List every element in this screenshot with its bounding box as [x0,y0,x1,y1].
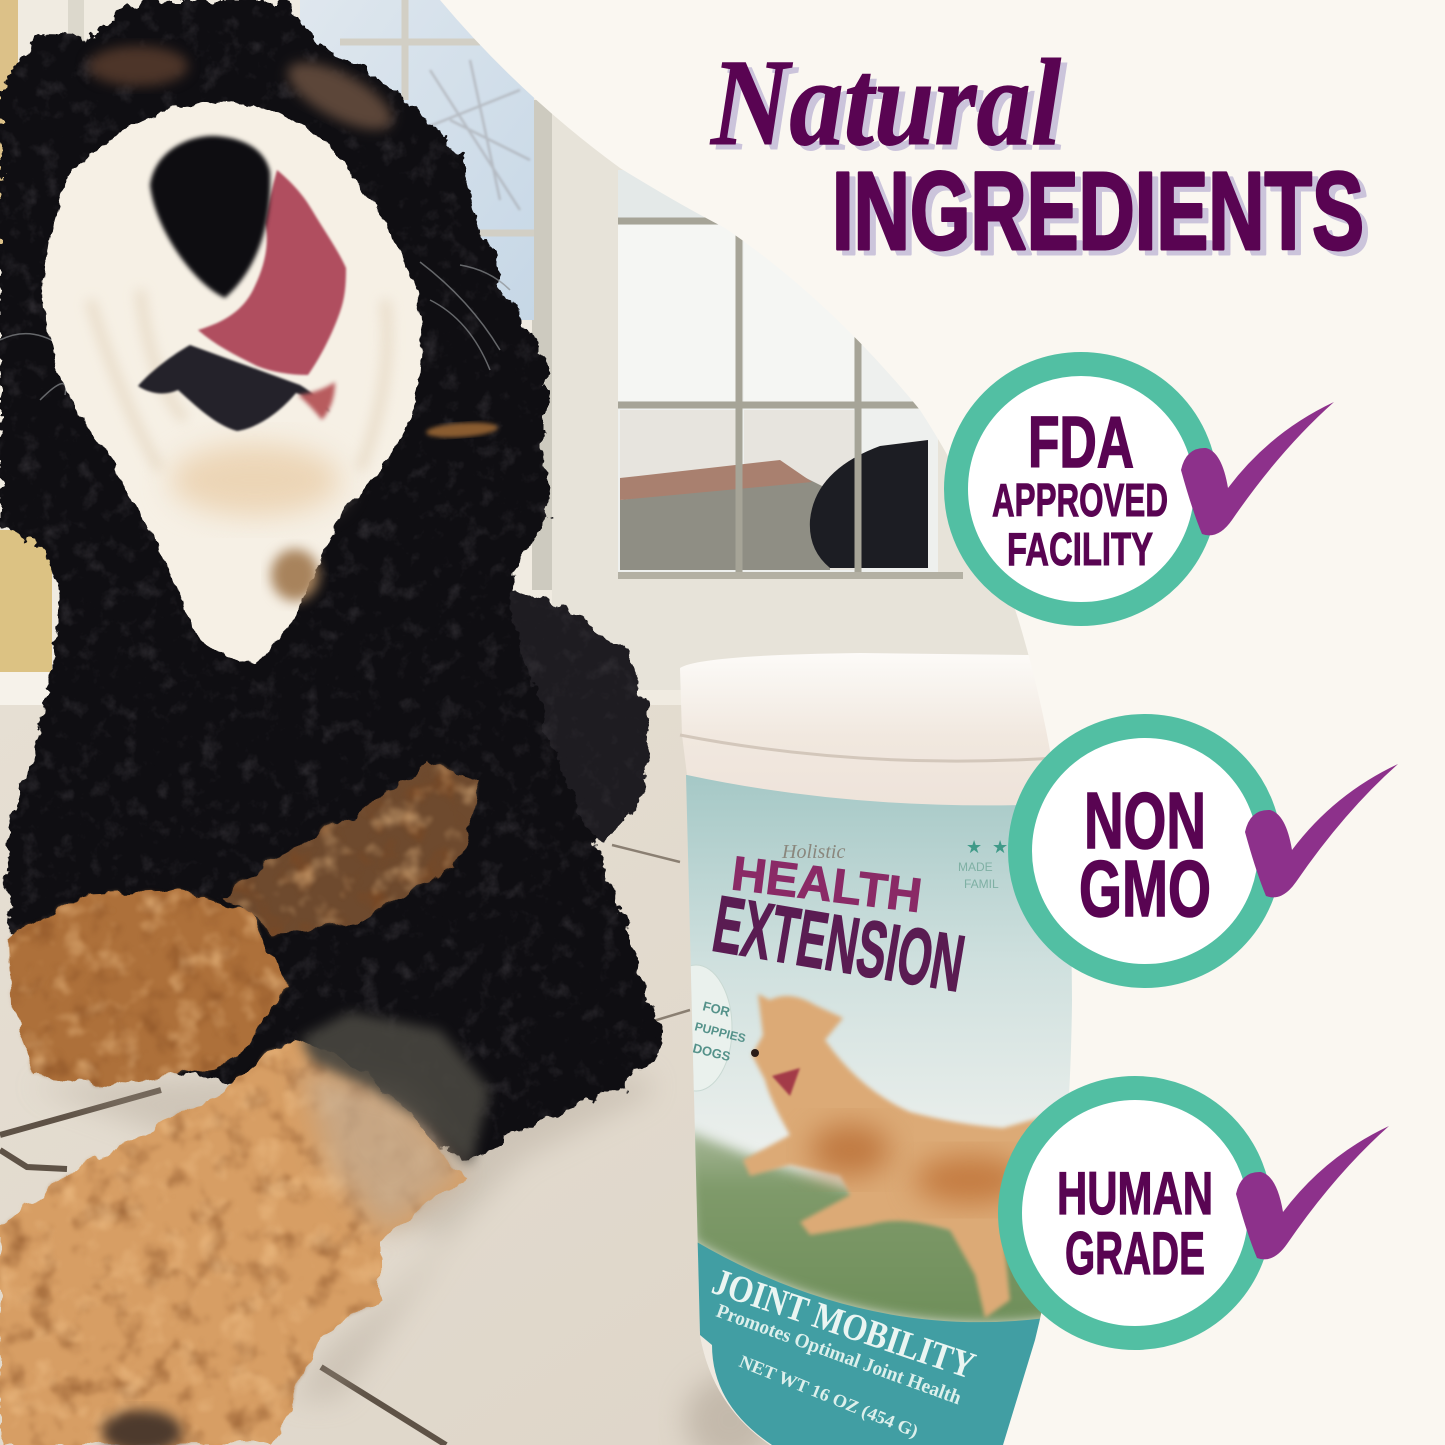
icon: check mark [1236,1126,1389,1259]
dog lower lip pink [298,382,335,420]
dog brown eyebrow right [278,49,402,143]
jar label teal band [690,1238,1060,1445]
badge: Non GMO: GMO [1079,844,1211,933]
dog foreleg grey transition [300,1012,490,1165]
supplement jar: HEALTH [729,847,925,923]
jar stars and made-by text: FAMIL [964,877,999,891]
icon: check mark [1181,402,1334,535]
jar stars and made-by text [958,837,1008,891]
supplement jar: Promotes Optimal Joint Health [713,1300,964,1409]
jar label grass [685,1130,1060,1324]
dog front curly paw [0,1040,462,1445]
jar brand name: Holistic [781,841,845,863]
dog tongue [198,170,346,375]
jar label background [686,775,1075,1445]
dog mouth [138,345,330,431]
jar label running golden dog [743,994,1060,1318]
jar lid rim line [680,735,1056,761]
cream curved panel [440,0,1445,1445]
jar product name: JOINT MOBILITY [707,1261,980,1387]
dog black fur body and head [0,0,665,1160]
photo: dog and supplement jar in a sunlit room [0,0,1100,1445]
jar label sticker: PUPPIES [693,1019,747,1045]
badge: FDA approved facility: FACILITY [1007,523,1153,575]
jar label sticker [690,964,746,1092]
badge: FDA approved facility: APPROVED [992,474,1168,526]
dog nose [150,136,270,298]
dog chin tint [170,444,340,516]
supplement jar [660,653,1075,1445]
jar lid [680,653,1056,805]
jar label sticker: FOR [701,998,732,1020]
dog brown eyebrow left [88,46,188,86]
floor shadow beneath dog [30,1075,650,1400]
heading script word: Natural [715,39,1067,176]
jar stars and made-by text: ★ [966,837,982,857]
dog foreleg beige transition [300,1065,465,1235]
heading script word: Natural [709,34,1061,171]
dog neck curl tint [271,549,319,601]
right window panes [618,170,963,579]
dog resting tan paw [9,890,290,1085]
badge: Non GMO [1020,726,1398,976]
door panel [552,100,1032,690]
badge: Human grade: GRADE [1065,1220,1205,1287]
heading: Natural Ingredients [709,34,1370,278]
jar lower rim [700,1335,800,1445]
dog chest tan patch [223,762,478,933]
dog hind body [480,585,650,845]
badge: FDA approved facility: FDA [1028,403,1134,483]
left window frame [68,0,84,60]
jar floor shadow [685,1375,775,1445]
badge: Human grade [1010,1088,1389,1338]
supplement jar: EXTENSION [707,879,970,1008]
dog white face and neck [43,102,421,665]
dog muzzle soft shading [90,290,387,470]
dog stray grey hair strands [0,262,510,400]
floor [0,705,1100,1445]
floor tile grout [0,1090,446,1445]
icon: check mark [1245,764,1398,897]
upper left window with tree [300,0,534,320]
badge: Human grade: HUMAN [1057,1160,1213,1227]
badge: FDA approved facility [956,364,1334,614]
dog paw dark tip [102,1410,182,1445]
supplement jar: NET WT 16 OZ (454 G) [736,1351,921,1442]
badge: Non GMO: NON [1084,776,1206,865]
jar label sticker: DOGS [691,1040,732,1064]
room wall [0,0,1100,730]
jar stars and made-by text: MADE [958,860,993,874]
jar stars and made-by text: ★ [992,837,1008,857]
dog tan cheek streak [426,421,498,439]
